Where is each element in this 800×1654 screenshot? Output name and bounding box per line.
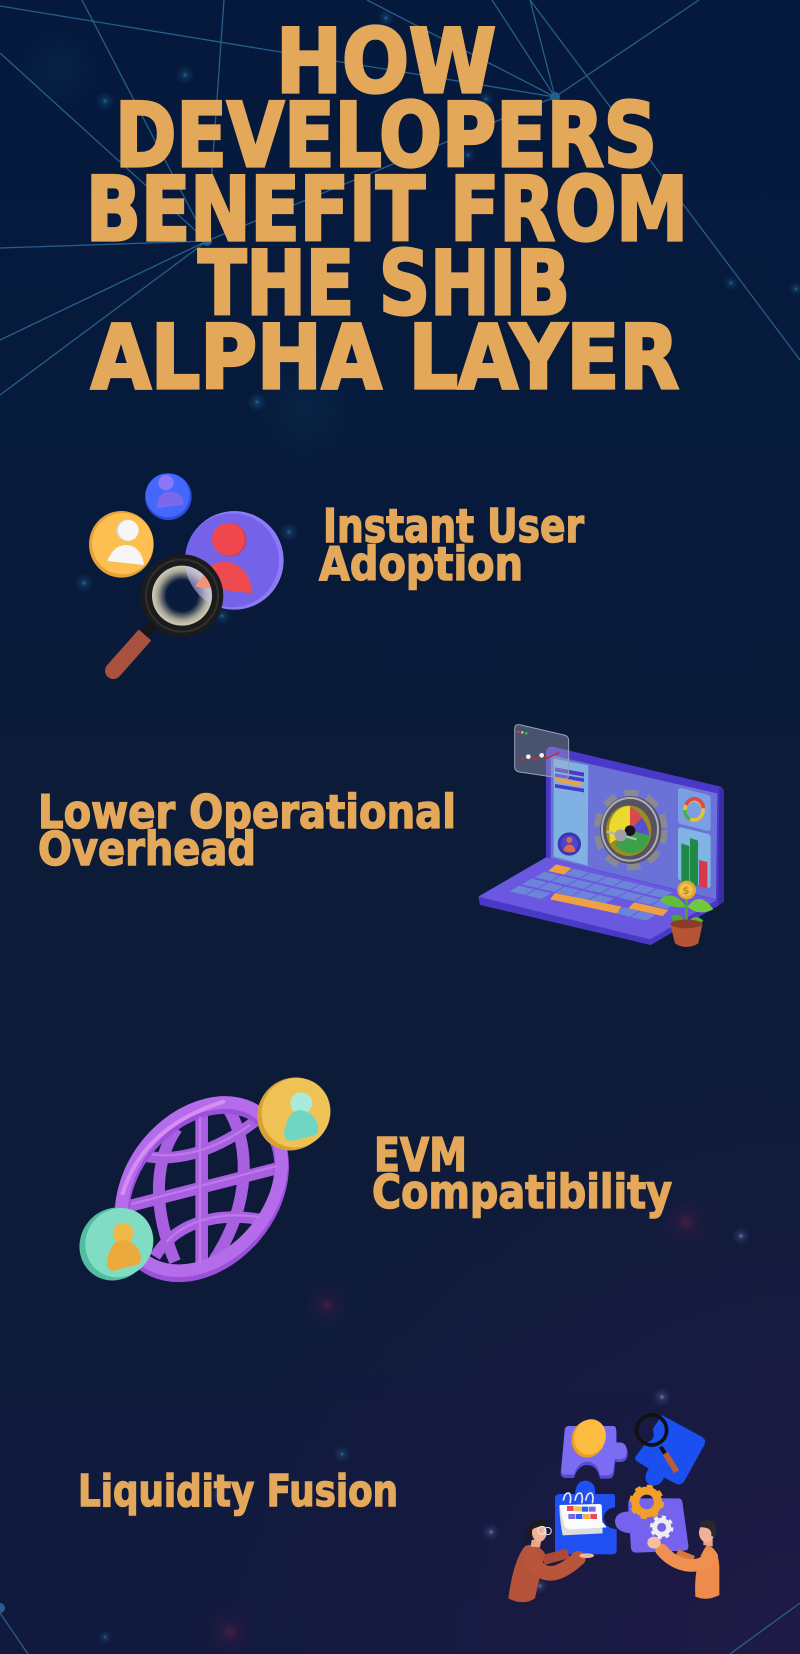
title: DEVELOPERS (115, 84, 657, 187)
money plant: $ (682, 884, 690, 897)
laptop screen (546, 747, 724, 907)
heading: lower operational overhead: Lower Operational (38, 785, 456, 839)
icon: users and magnifying glass (89, 473, 284, 679)
icon: magnifying glass (105, 554, 224, 679)
title: BENEFIT FROM (86, 158, 688, 261)
puzzle piece with coin (561, 1415, 628, 1479)
title: ALPHA LAYER (91, 306, 679, 409)
heading: instant user adoption: Instant User (323, 499, 584, 553)
gear gauge (597, 793, 664, 867)
floating chart window (515, 725, 569, 779)
title: THE SHIB (198, 232, 570, 335)
money plant (659, 881, 713, 947)
keyboard (478, 857, 717, 945)
puzzle piece with magnifier (635, 1415, 705, 1485)
user badge: teal (65, 1194, 167, 1294)
icon: team assembling puzzle (508, 1415, 719, 1602)
user badge: yellow (243, 1064, 344, 1164)
heading: evm compatibility: EVM (374, 1128, 467, 1182)
wire globe (89, 1071, 315, 1307)
title: HOW (276, 10, 496, 113)
puzzle piece with gears (615, 1487, 688, 1553)
person: woman (508, 1519, 594, 1602)
heading: instant user adoption: Adoption (319, 537, 523, 591)
heading: instant user adoption (319, 499, 584, 591)
heading: lower operational overhead: Overhead (38, 822, 256, 876)
icon: small blue user (145, 473, 192, 520)
heading: lower operational overhead (38, 785, 456, 876)
heading: evm compatibility (372, 1128, 672, 1219)
icon: purple user (185, 511, 284, 610)
icon: laptop dashboard (478, 725, 724, 947)
icon: globe with two users (65, 1064, 344, 1307)
icon: yellow user (89, 511, 154, 578)
heading: evm compatibility: Compatibility (372, 1165, 672, 1219)
title (86, 10, 688, 409)
puzzle piece with calendar (555, 1481, 617, 1554)
heading: liquidity fusion: Liquidity Fusion (78, 1466, 398, 1517)
person: man (647, 1520, 719, 1599)
